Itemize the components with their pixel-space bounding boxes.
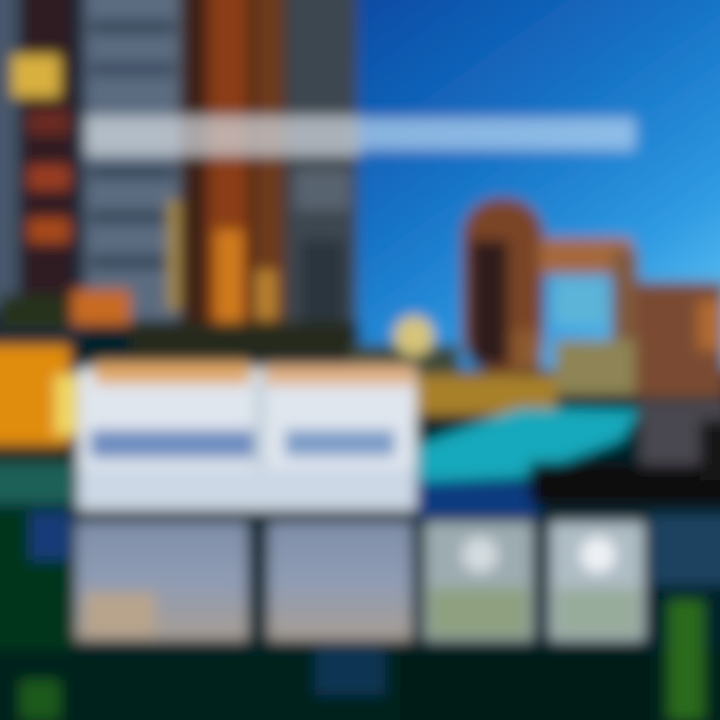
sky [350,0,720,370]
foreground trees below towers [0,295,460,375]
panel: lower stat cards [76,522,644,640]
heading band [85,116,635,156]
teal water strip [0,375,720,518]
arched building [394,198,720,397]
amber left block [0,345,77,445]
left towers [0,0,357,340]
lower dark ground [0,510,720,720]
panel: upper info cards [78,362,416,510]
